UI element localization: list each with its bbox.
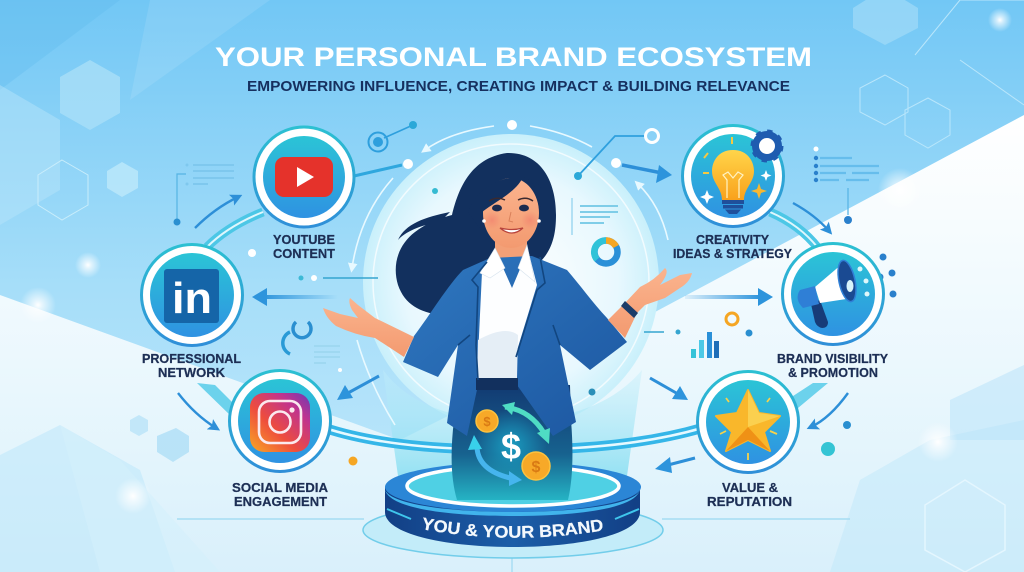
label: social media engagement: SOCIAL MEDIA (232, 480, 329, 495)
top orbit arcs and arrows (352, 120, 668, 425)
label: YouTube content: YOUTUBE (273, 232, 335, 247)
label: professional network: PROFESSIONAL (142, 351, 241, 366)
left forearm and hand (323, 298, 414, 357)
label: value and reputation: REPUTATION (707, 494, 792, 509)
decorative nodes: right (572, 130, 896, 456)
icon: lightbulb and gear (682, 126, 784, 226)
jacket (403, 256, 627, 436)
woman (323, 153, 692, 500)
icon: YouTube (254, 127, 354, 227)
face (483, 178, 539, 248)
dollar cycle emblem (468, 402, 550, 486)
label: brand visibility and promotion (777, 351, 888, 380)
lapel lines (458, 257, 560, 380)
label: YouTube content (273, 232, 335, 261)
platform label: YOU & YOUR BRAND (423, 517, 602, 538)
label: YouTube content: CONTENT (273, 246, 335, 261)
base lines (177, 519, 850, 572)
icon: megaphone (782, 244, 884, 344)
label: creativity, ideas and strategy (673, 232, 792, 261)
label: brand visibility and promotion: BRAND VISIBILITY (777, 351, 888, 366)
title: YOUR PERSONAL BRAND ECOSYSTEM (215, 42, 812, 72)
central halo dome (363, 134, 659, 490)
icon: star (698, 372, 798, 472)
trousers (452, 385, 572, 500)
label: professional network (142, 351, 241, 380)
waistband (476, 378, 518, 390)
label: professional network: NETWORK (158, 365, 226, 380)
label: social media engagement: ENGAGEMENT (234, 494, 327, 509)
connecting bands (197, 212, 828, 449)
arrows (178, 165, 848, 473)
decorative nodes: left (174, 121, 438, 466)
icon: LinkedIn (142, 244, 242, 346)
label: creativity, ideas and strategy: CREATIVITY (696, 232, 769, 247)
right forearm and hand (608, 268, 692, 338)
facial features (482, 198, 541, 233)
label: brand visibility and promotion: & PROMOTION (788, 365, 878, 380)
neck (495, 238, 527, 288)
label: social media engagement (232, 480, 329, 509)
label: creativity, ideas and strategy: IDEAS & STRATEGY (673, 246, 792, 261)
subtitle: EMPOWERING INFLUENCE, CREATING IMPACT & BUILDING RELEVANCE (247, 78, 790, 95)
platform (363, 462, 663, 558)
icon: Instagram (230, 370, 330, 472)
watch (621, 301, 638, 318)
collar (480, 245, 535, 282)
icon: LinkedIn: in (172, 274, 212, 323)
dollar cycle emblem: $ (483, 414, 491, 429)
label: value and reputation: VALUE & (722, 480, 778, 495)
shirt (477, 250, 537, 378)
hair (396, 153, 556, 315)
hair fringe (468, 177, 543, 230)
dollar cycle emblem: $ (501, 426, 521, 467)
label: value and reputation (707, 480, 792, 509)
dollar cycle emblem: $ (532, 459, 541, 476)
